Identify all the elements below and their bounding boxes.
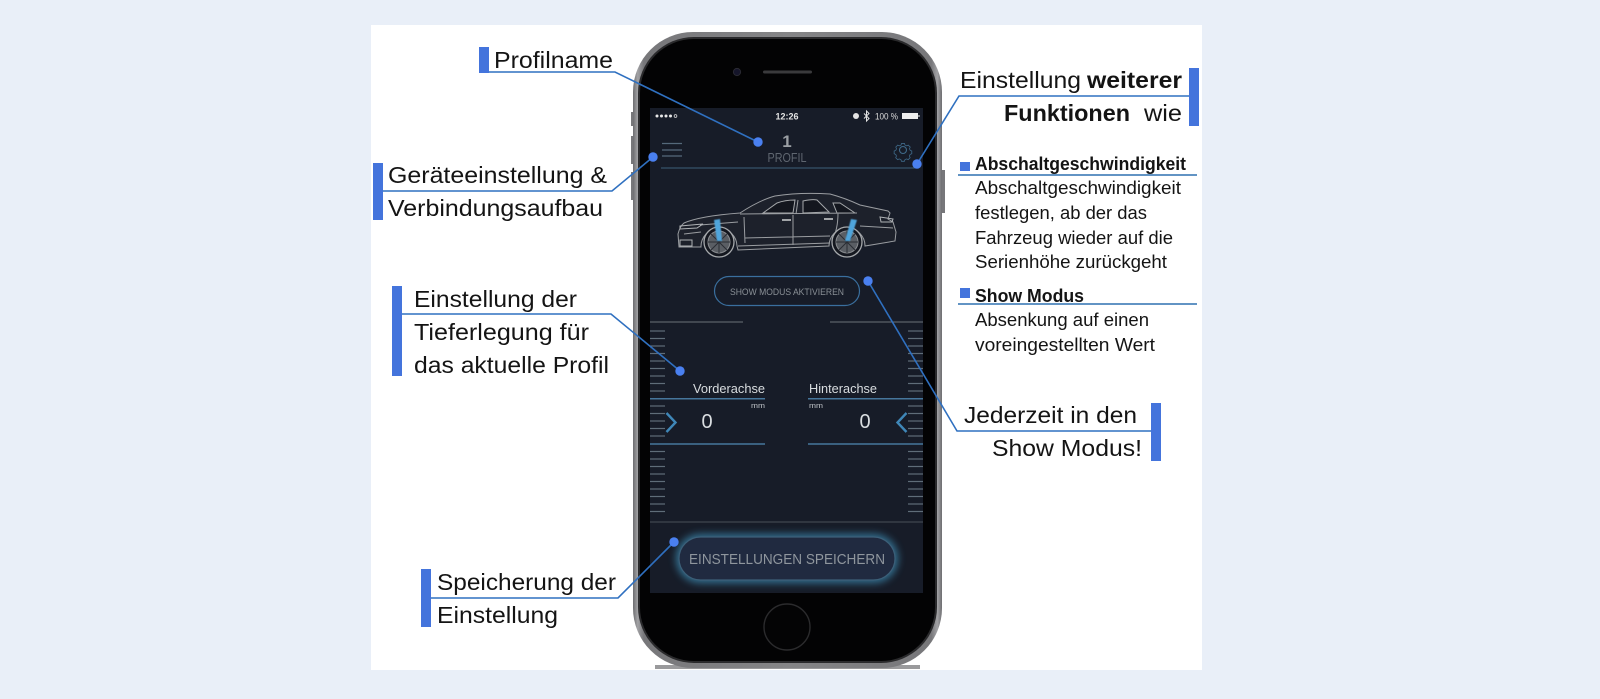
callout: Profilname: Profilname: [494, 47, 613, 73]
callout: Profilname: [479, 47, 763, 147]
callout: Tieferlegung: [392, 286, 685, 378]
callout: weitere Funktionen: Funktionen: [1004, 100, 1130, 126]
settings gear icon: [894, 143, 912, 161]
text block: Show Modus: voreingestellten Wert: [975, 335, 1155, 355]
front axle control: Vorderachse: [693, 381, 765, 396]
menu icon: [662, 144, 682, 156]
callout: Speicherung: [421, 537, 679, 628]
callout: Jederzeit in den Show Modus: Show Modus!: [992, 435, 1142, 461]
rear axle control: [808, 381, 923, 444]
camera: [733, 68, 741, 76]
ruler ticks left: [650, 331, 665, 512]
rear axle control: Hinterachse: [809, 381, 877, 396]
text block: Abschaltgeschwindigkeit: festlegen, ab der das: [975, 203, 1147, 223]
time: 12:26: [775, 112, 799, 122]
profile label: PROFIL: [768, 151, 807, 165]
callout: Jederzeit in den Show Modus: [863, 276, 1161, 461]
callout: Tieferlegung: Einstellung der: [414, 286, 577, 312]
slider top lines: [650, 321, 923, 323]
rear wheel: [832, 227, 862, 257]
phone bottom shadow: [655, 665, 920, 669]
phone mockup: [631, 32, 945, 669]
text block: Abschaltgeschwindigkeit: Abschaltgeschwindigkeit: [975, 178, 1181, 198]
text block: Abschaltgeschwindigkeit: Abschaltgeschwindigkeit: [975, 154, 1186, 174]
front axle control: 0: [701, 411, 713, 433]
callout: weitere Funktionen: wie: [1143, 100, 1182, 126]
show mode button: SHOW MODUS AKTIVIEREN: [730, 287, 844, 297]
front wheel: [704, 227, 734, 257]
text block: Show Modus: Show Modus: [975, 286, 1084, 306]
bottom divider: [650, 521, 923, 523]
background panel: [371, 25, 1202, 670]
speaker: [763, 70, 812, 74]
callout: Geräteeinstellung: [373, 152, 658, 221]
text block: Abschaltgeschwindigkeit: [958, 154, 1197, 272]
callout: Jederzeit in den Show Modus: Jederzeit in den: [964, 402, 1137, 428]
rear axle control: 0: [859, 411, 871, 433]
phone side buttons: [631, 112, 945, 213]
ruler ticks right: [908, 331, 923, 512]
profile number: 1: [782, 132, 792, 151]
callout: weitere Funktionen: Einstellung: [960, 67, 1081, 93]
callout: Speicherung: Speicherung der: [437, 569, 616, 595]
text block: Show Modus: [958, 286, 1197, 355]
header divider: [661, 167, 917, 169]
battery percentage: 100 %: [875, 112, 898, 122]
car windows: [763, 200, 855, 213]
alarm icon: [853, 113, 859, 119]
car illustration: [678, 193, 896, 257]
signal dots: [656, 114, 677, 118]
show mode button: [714, 276, 860, 306]
callout: Geräteeinstellung: Geräteeinstellung &: [388, 162, 607, 188]
phone body: [633, 32, 942, 668]
front axle control: mm: [751, 401, 765, 410]
text block: Abschaltgeschwindigkeit: Serienhöhe zurückgeht: [975, 252, 1167, 272]
callout: weitere Funktionen: [912, 67, 1199, 169]
rear suspension highlight: [845, 219, 857, 241]
bluetooth icon: [864, 111, 869, 121]
callout: weitere Funktionen: weiterer: [1086, 67, 1182, 93]
car details: [684, 200, 893, 246]
front axle control: [650, 381, 765, 444]
save button: EINSTELLUNGEN SPEICHERN: [689, 551, 885, 568]
battery: [902, 113, 920, 119]
callout: Tieferlegung: das aktuelle Profil: [414, 352, 609, 378]
text block: Show Modus: Absenkung auf einen: [975, 310, 1149, 330]
callout: Geräteeinstellung: Verbindungsaufbau: [388, 195, 603, 221]
callout: Speicherung: Einstellung: [437, 602, 558, 628]
rear axle control: mm: [809, 401, 823, 410]
text block: Abschaltgeschwindigkeit: Fahrzeug wieder auf die: [975, 228, 1173, 248]
status bar: [656, 111, 920, 122]
callout: Tieferlegung: Tieferlegung für: [414, 319, 589, 345]
save button: [676, 534, 898, 583]
car body: [678, 193, 896, 250]
app screen: [650, 108, 923, 593]
front suspension highlight: [714, 219, 722, 241]
home button: [764, 604, 810, 650]
